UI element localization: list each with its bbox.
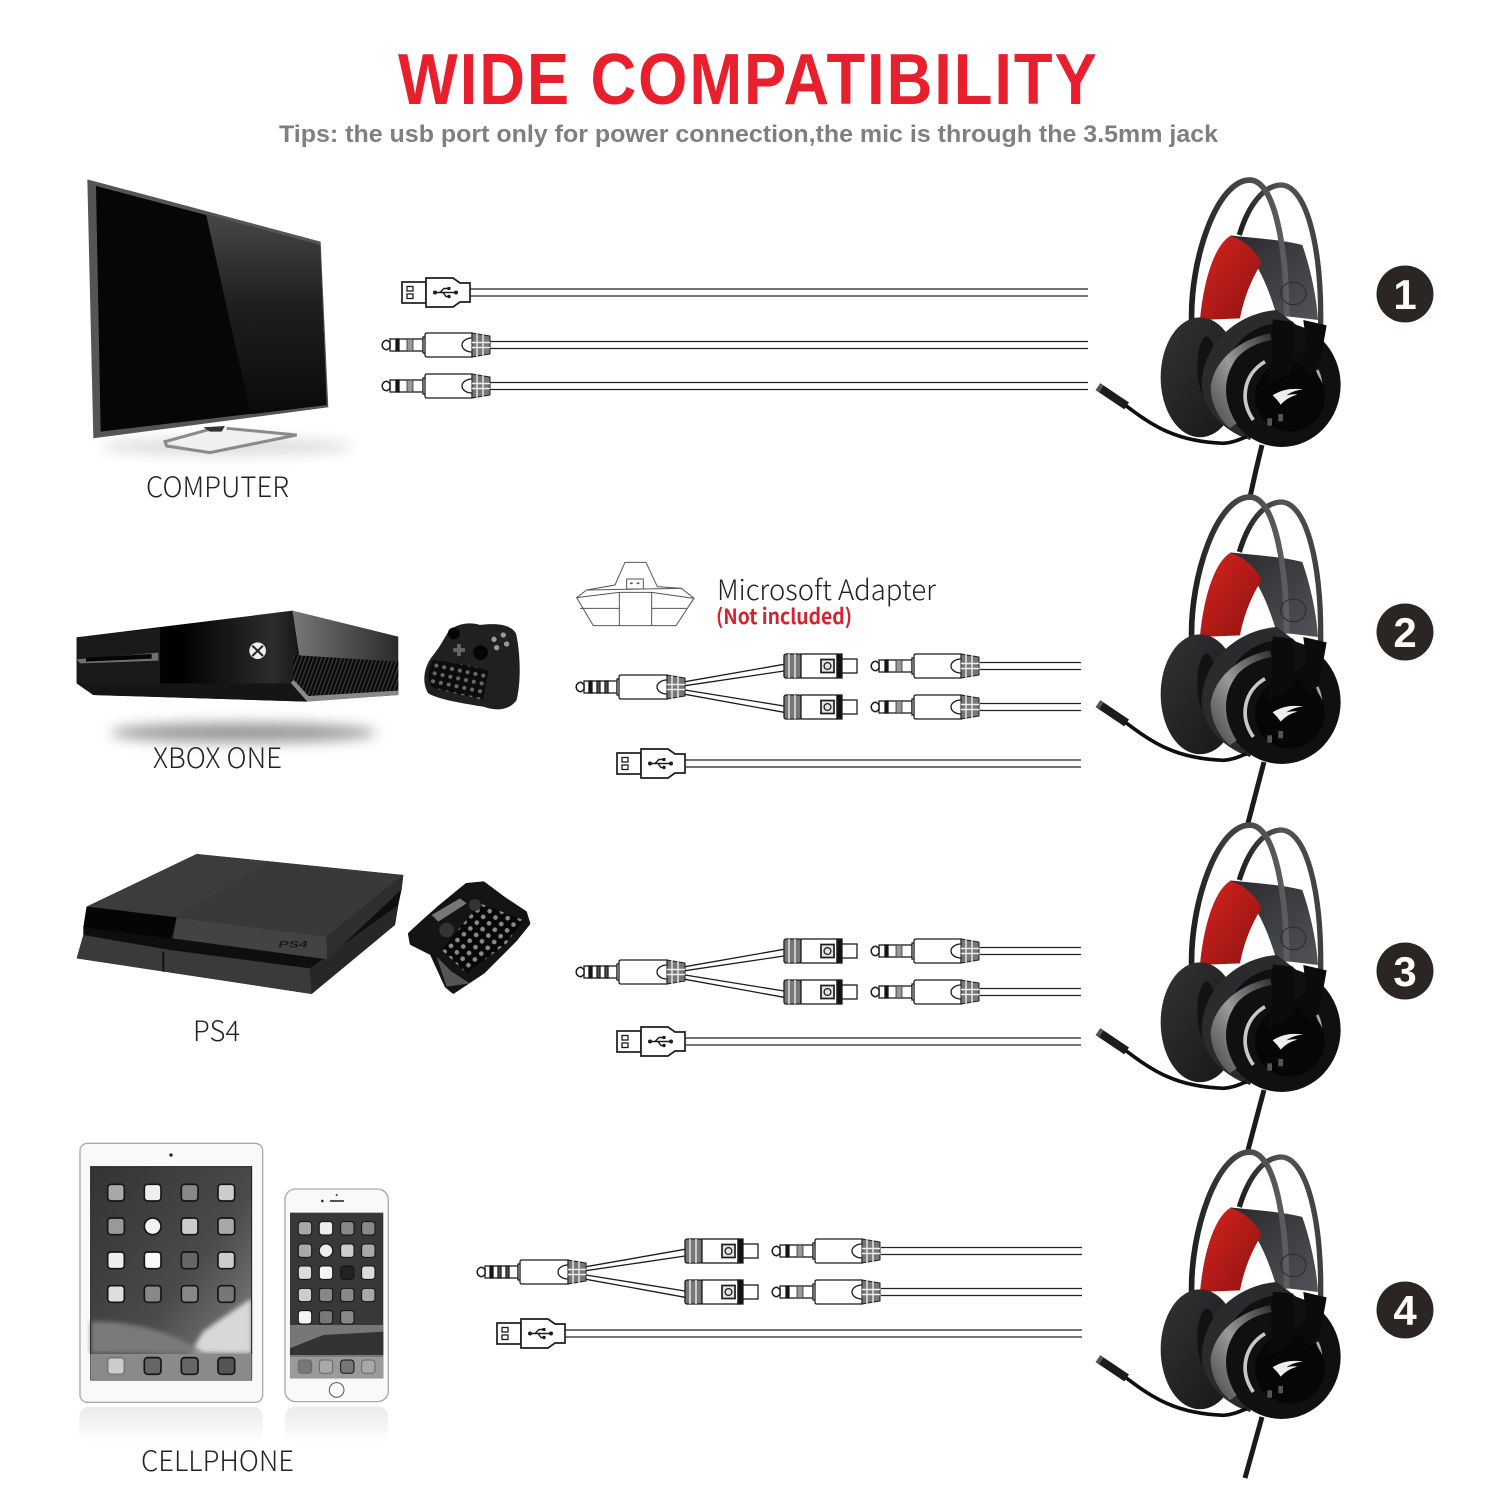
number badge 3 bbox=[1376, 942, 1434, 1000]
number badge 1 bbox=[1376, 266, 1434, 322]
headset 2 bbox=[1098, 497, 1341, 823]
not included note: (Not included) bbox=[716, 601, 852, 631]
headset 4 bbox=[1098, 1152, 1341, 1478]
row 2 cables bbox=[576, 654, 1081, 778]
title: WIDE COMPATIBILITY bbox=[398, 40, 1097, 120]
device: computer monitor bbox=[87, 179, 353, 455]
row 1 cables bbox=[382, 278, 1088, 398]
number badge 1: 1 bbox=[1393, 271, 1417, 318]
row 3 cables bbox=[576, 939, 1081, 1056]
device: ps4 console bbox=[77, 854, 403, 994]
subtitle tips: Tips: the usb port only for power connection,the mic is through the 3.5mm jack bbox=[279, 121, 1219, 148]
device: ps4 controller with keyboard bbox=[410, 883, 528, 992]
headset 3 bbox=[1098, 825, 1341, 1150]
device: xbox one console bbox=[77, 611, 398, 743]
label: xbox one: XBOX ONE bbox=[153, 737, 282, 777]
label: ps4: PS4 bbox=[193, 1010, 240, 1050]
icon: microsoft adapter bbox=[577, 562, 694, 626]
number badge 4 bbox=[1376, 1282, 1434, 1338]
number badge 2 bbox=[1376, 604, 1434, 660]
headset 1 bbox=[1098, 180, 1341, 497]
row 4 cables bbox=[477, 1239, 1082, 1348]
number badge 3: 3 bbox=[1393, 948, 1417, 995]
label: cellphone: CELLPHONE bbox=[141, 1440, 294, 1480]
adapter label: Microsoft Adapter bbox=[717, 569, 937, 609]
device: phone bbox=[285, 1189, 388, 1443]
device: xbox controller with keyboard bbox=[424, 623, 520, 709]
device: tablet bbox=[79, 1143, 263, 1443]
number badge 2: 2 bbox=[1393, 609, 1417, 656]
device: ps4 console: PS4 bbox=[278, 939, 309, 949]
label: computer: COMPUTER bbox=[146, 466, 289, 506]
number badge 4: 4 bbox=[1393, 1287, 1417, 1334]
